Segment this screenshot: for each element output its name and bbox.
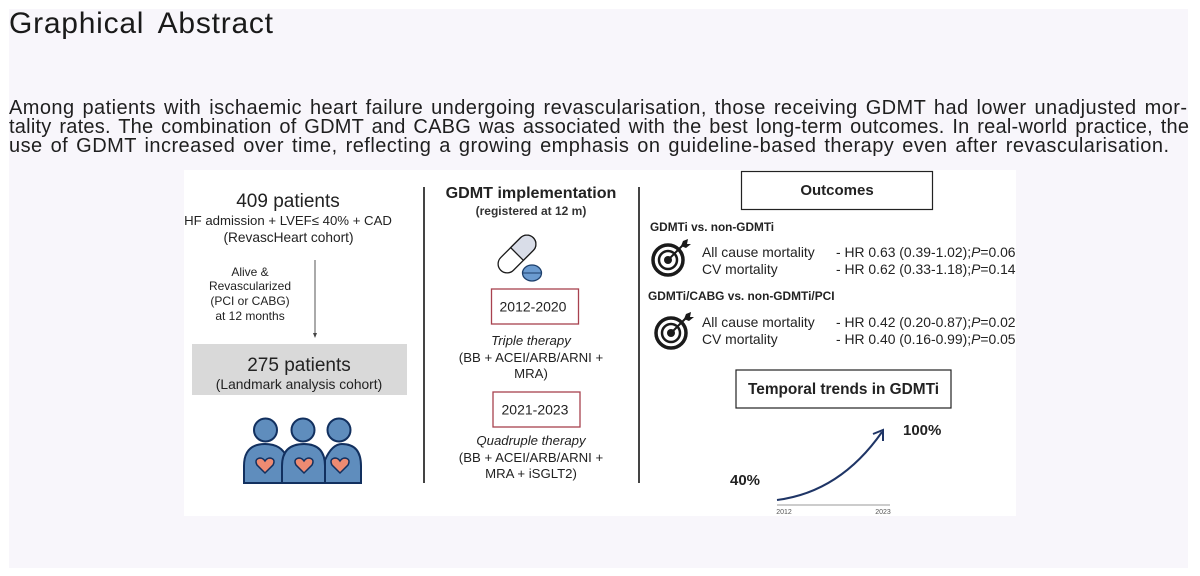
comparison 2 heading: GDMTi/CABG vs. non-GDMTi/PCI xyxy=(648,289,835,303)
summary text: use of GDMT increased over time, reflecting a growing emphasis on guideline-based therapy even after revascularisation. xyxy=(9,135,1169,157)
summary text xyxy=(9,97,1189,157)
column dividers xyxy=(424,187,639,483)
comparison 1 results: - HR 0.62 (0.33-1.18);P=0.14 xyxy=(836,261,1016,277)
column: GDMT implementation xyxy=(446,184,616,481)
quadruple therapy text: Quadruple therapy xyxy=(476,433,587,448)
icon: target 1 xyxy=(653,239,691,275)
arrow label: Alive & xyxy=(231,265,269,279)
title: Graphical Abstract xyxy=(9,7,274,40)
comparison 1 results xyxy=(702,244,1016,277)
comparison 2 results xyxy=(702,314,1016,347)
column: cohort xyxy=(184,191,407,395)
box: landmark cohort xyxy=(192,344,407,395)
box: landmark cohort: 275 patients xyxy=(247,355,351,376)
summary text: Among patients with ischaemic heart failure undergoing revascularisation, those receiving GDMT had lower unadjusted mor- xyxy=(9,97,1187,119)
cohort criteria: HF admission + LVEF≤ 40% + CAD xyxy=(184,213,392,228)
temporal trends box xyxy=(736,370,951,408)
box: 2012-2020: 2012-2020 xyxy=(500,298,567,314)
temporal trends box: Temporal trends in GDMTi xyxy=(748,381,939,398)
GDMT heading: GDMT implementation xyxy=(446,184,616,202)
summary text: tality rates. The combination of GDMT and CABG was associated with the best long-term outcomes. In real-world practice, the xyxy=(9,116,1189,138)
value labels: 40% xyxy=(730,472,760,489)
quadruple therapy text xyxy=(459,433,603,481)
quadruple therapy text: MRA + iSGLT2) xyxy=(485,466,577,481)
down arrow xyxy=(313,260,317,338)
icon: target 2 xyxy=(656,312,694,348)
comparison 2 results: - HR 0.40 (0.16-0.99);P=0.05 xyxy=(836,331,1016,347)
arrow label: (PCI or CABG) xyxy=(210,294,290,308)
box: 2021-2023 xyxy=(493,392,580,427)
arrow label: Revascularized xyxy=(209,279,291,293)
quadruple therapy text: (BB + ACEI/ARB/ARNI + xyxy=(459,450,603,465)
outcomes header box xyxy=(742,172,932,210)
icon: patients with hearts xyxy=(244,418,361,483)
year labels xyxy=(776,509,891,516)
triple therapy text xyxy=(459,333,603,381)
arrow label xyxy=(209,265,291,323)
year labels: 2023 xyxy=(875,509,891,516)
outcomes header box: Outcomes xyxy=(800,182,874,199)
trend chart xyxy=(730,422,941,516)
box: 2012-2020 xyxy=(492,289,578,324)
cohort heading: 409 patients xyxy=(236,191,340,212)
column: cohort: (RevascHeart cohort) xyxy=(223,230,354,245)
figure panel xyxy=(184,170,1016,516)
box: landmark cohort: (Landmark analysis cohort) xyxy=(216,377,382,392)
box: 2021-2023: 2021-2023 xyxy=(502,402,569,418)
triple therapy text: (BB + ACEI/ARB/ARNI + xyxy=(459,350,603,365)
comparison 1 results: - HR 0.63 (0.39-1.02);P=0.06 xyxy=(836,244,1016,260)
year labels: 2012 xyxy=(776,509,792,516)
comparison 1 results: CV mortality xyxy=(702,261,778,277)
arrow label: at 12 months xyxy=(215,309,285,323)
comparison 2 results: CV mortality xyxy=(702,331,778,347)
GDMT subheading: (registered at 12 m) xyxy=(476,204,586,218)
comparison 1 heading: GDMTi vs. non-GDMTi xyxy=(650,220,774,234)
axis xyxy=(777,504,890,506)
comparison 2 results: - HR 0.42 (0.20-0.87);P=0.02 xyxy=(836,314,1016,330)
trend arrow xyxy=(777,430,883,500)
icon: pill capsule xyxy=(494,231,542,281)
comparison 1 results: All cause mortality xyxy=(702,244,815,260)
triple therapy text: Triple therapy xyxy=(491,333,572,348)
comparison 2 results: All cause mortality xyxy=(702,314,815,330)
trend chart: 100% xyxy=(903,422,941,439)
triple therapy text: MRA) xyxy=(514,366,548,381)
